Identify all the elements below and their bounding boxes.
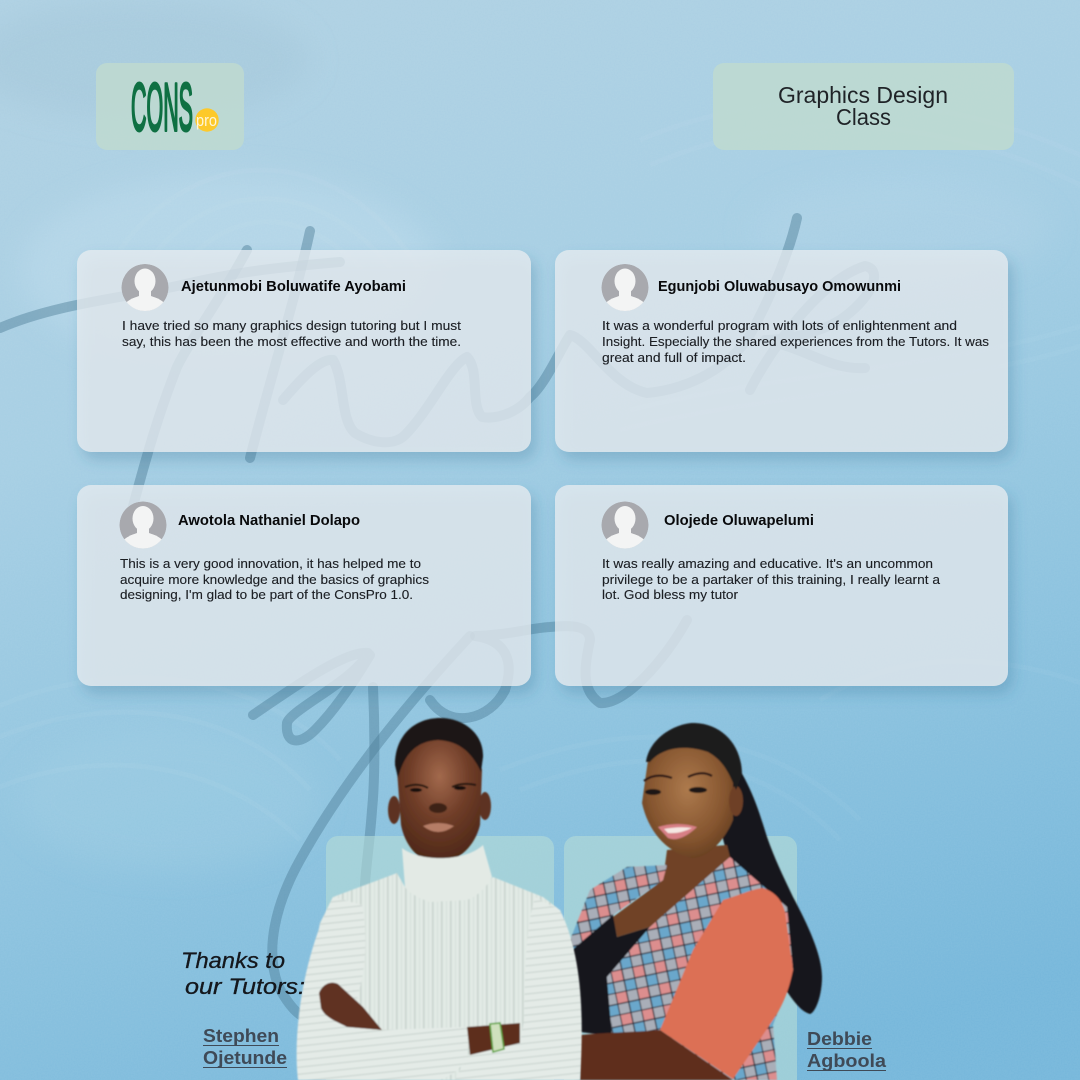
plaid shoulder xyxy=(570,865,667,955)
face xyxy=(642,739,733,858)
sleeves xyxy=(297,897,468,1080)
eyes brows and smile xyxy=(644,773,712,839)
script watermark: Thank you xyxy=(0,218,874,1016)
testimonial text: This is a very good innovation, it has helped me to xyxy=(120,556,421,571)
forearm xyxy=(580,1030,733,1080)
neck and chest xyxy=(613,845,730,937)
testimonial text: privilege to be a partaker of this training, I really learnt a xyxy=(602,572,941,587)
icon: avatar 1 xyxy=(122,264,168,311)
right wrist xyxy=(467,1023,520,1055)
testimonial text: designing, I'm glad to be part of the ConsPro 1.0. xyxy=(120,587,413,602)
icon: avatar 3 xyxy=(120,502,166,548)
left hand xyxy=(319,983,382,1030)
testimonial text: It was really amazing and educative. It's an uncommon xyxy=(602,556,933,571)
sweater xyxy=(297,873,580,1080)
ears xyxy=(388,792,491,824)
tutor backing panel right xyxy=(564,836,797,1080)
logo: CONS pro xyxy=(131,70,219,146)
tutor name: Debbie Agboola: Agboola xyxy=(807,1051,887,1071)
testimonial text: lot. God bless my tutor xyxy=(602,587,739,602)
logo panel: CONS xyxy=(131,70,193,146)
testimonial text: It was a wonderful program with lots of enlightenment and xyxy=(602,318,957,333)
logo panel xyxy=(96,63,244,150)
handwritten: Thanks to our Tutors: our Tutors: xyxy=(185,974,305,999)
plaid centre xyxy=(607,857,793,1080)
bracelet xyxy=(490,1023,504,1052)
tutor backing panel left xyxy=(326,836,554,1080)
logo: CONS pro: pro xyxy=(196,111,217,130)
name: Awotola Nathaniel Dolapo xyxy=(178,513,360,529)
tutor name: Stephen Ojetunde xyxy=(203,1026,287,1068)
hair xyxy=(646,723,742,790)
title: Graphics Design Class: Class xyxy=(836,104,891,130)
name: Ajetunmobi Boluwatife Ayobami xyxy=(181,279,406,295)
black top xyxy=(572,915,650,1036)
ponytail xyxy=(722,755,822,1014)
testimonial text: acquire more knowledge and the basics of graphics xyxy=(120,572,429,587)
icon: avatar 4 xyxy=(602,502,648,548)
panel: testimonial 1 xyxy=(77,250,531,452)
panel: testimonial 3 xyxy=(77,485,531,686)
tutor name: Stephen Ojetunde: Ojetunde xyxy=(203,1048,287,1068)
testimonial text: great and full of impact. xyxy=(602,350,746,365)
title: Graphics Design Class: Graphics Design xyxy=(778,82,948,108)
name: Olojede Oluwapelumi xyxy=(664,513,814,529)
panel: testimonial 4 xyxy=(555,485,1008,686)
photo: male tutor xyxy=(297,718,582,1080)
tutor name: Debbie Agboola xyxy=(807,1029,887,1071)
testimonial text: say, this has been the most effective and worth the time. xyxy=(122,334,461,349)
testimonial text: I have tried so many graphics design tutoring but I must xyxy=(122,318,461,333)
handwritten: Thanks to our Tutors: Thanks to xyxy=(181,948,285,973)
photo: female tutor xyxy=(570,723,822,1080)
turtleneck xyxy=(402,845,492,902)
testimonial text: Insight. Especially the shared experiences from the Tutors. It was xyxy=(602,334,989,349)
tutor name: Stephen Ojetunde: Stephen xyxy=(203,1026,279,1046)
orange sleeve xyxy=(660,888,793,1079)
name: Egunjobi Oluwabusayo Omowunmi xyxy=(658,279,901,295)
face and neck xyxy=(397,739,482,863)
hair xyxy=(395,718,483,778)
eyes and mouth xyxy=(405,784,476,832)
icon: avatar 2 xyxy=(602,264,648,311)
tutor name: Debbie Agboola: Debbie xyxy=(807,1029,872,1049)
panel: testimonial 2 xyxy=(555,250,1008,452)
ear xyxy=(729,786,743,816)
title panel xyxy=(713,63,1014,150)
